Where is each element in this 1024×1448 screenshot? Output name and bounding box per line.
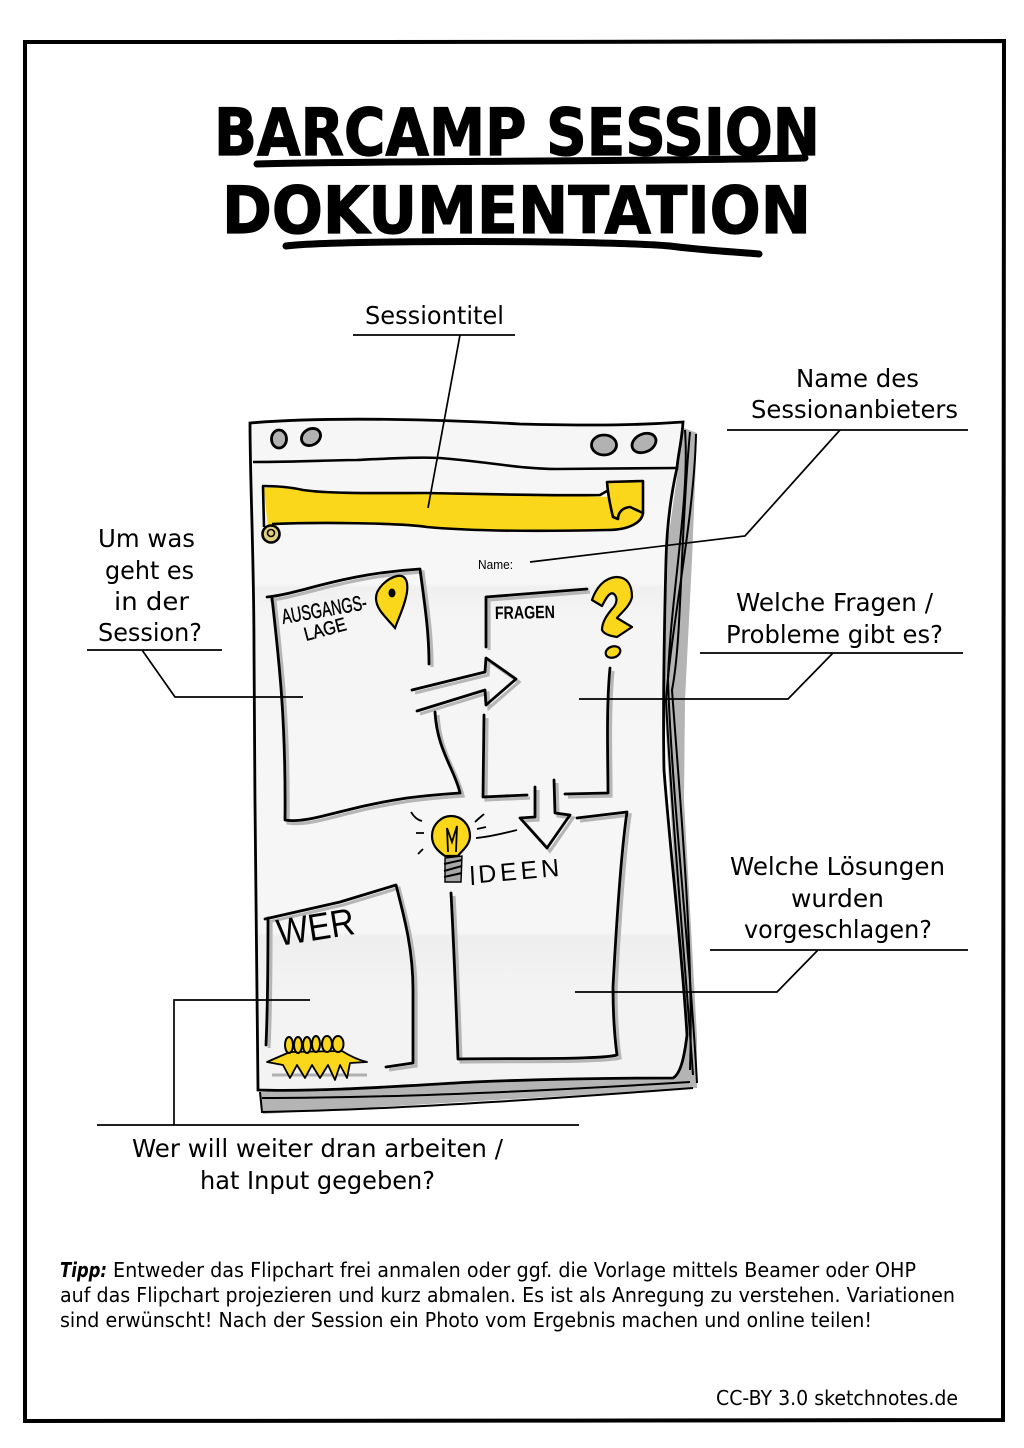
flipchart illustration <box>250 419 697 1114</box>
box heading: Ausgangslage <box>280 591 369 646</box>
annotation: Wer will weiter dran arbeiten <box>97 1000 579 1195</box>
title: BARCAMP SESSION <box>214 96 820 171</box>
annotation: Welche Lösungen wurden vorgeschlagen?: vorgeschlagen? <box>744 915 932 944</box>
annotation: Name des Sessionanbieters: Name des <box>796 364 919 393</box>
annotation: Sessiontitel <box>353 301 515 508</box>
box heading: Ausgangslage: AUSGANGS- <box>280 591 369 629</box>
sketched boxes and arrows <box>265 569 627 1067</box>
title <box>214 96 820 254</box>
annotation: Welche Fragen / Probleme gibt es? <box>579 588 963 699</box>
box shadows <box>268 572 630 1070</box>
box heading: Fragen: FRAGEN <box>495 602 555 623</box>
paper sheet <box>250 419 687 1090</box>
annotation: Name des Sessionanbieters: Sessionanbieters <box>751 395 958 424</box>
title banner <box>262 481 644 542</box>
annotation: Um was geht es in der Session?: Um was <box>98 524 195 553</box>
annotation: Wer will weiter dran arbeiten: Wer will weiter dran arbeiten / <box>132 1134 504 1163</box>
paper header line <box>253 458 677 469</box>
credit: CC-BY 3.0 sketchnotes.de <box>716 1386 958 1410</box>
tip text: Entweder das Flipchart frei anmalen oder ggf. die Vorlage mittels Beamer oder OHP <box>113 1258 916 1282</box>
annotation: Wer will weiter dran arbeiten: hat Input gegeben? <box>200 1166 435 1195</box>
annotation: Name des Sessionanbieters <box>530 364 968 562</box>
annotation: Um was geht es in der Session?: in der <box>114 587 190 616</box>
annotation: Welche Lösungen wurden vorgeschlagen?: wurden <box>791 884 884 913</box>
title: DOKUMENTATION <box>222 174 811 249</box>
name field label: Name: <box>478 557 513 572</box>
annotation: Welche Lösungen wurden vorgeschlagen?: Welche Lösungen <box>730 852 945 881</box>
tip text: Tipp: <box>60 1258 107 1282</box>
icon: question mark <box>592 577 632 660</box>
annotation: Welche Lösungen wurden vorgeschlagen? <box>575 852 968 992</box>
box heading: Ideen: DEEN <box>477 854 560 889</box>
annotation: Um was geht es in der Session?: geht es <box>105 556 194 585</box>
annotation: Welche Fragen / Probleme gibt es?: Probleme gibt es? <box>726 620 943 649</box>
tip text: sind erwünscht! Nach der Session ein Photo vom Ergebnis machen und online teilen! <box>60 1308 872 1332</box>
box heading: Ausgangslage: LAGE <box>302 614 349 646</box>
annotation: Um was geht es in der Session?: Session? <box>98 618 202 647</box>
annotation: Sessiontitel: Sessiontitel <box>365 301 504 330</box>
punched holes <box>272 425 659 456</box>
back pages <box>260 428 697 1114</box>
annotation: Welche Fragen / Probleme gibt es?: Welche Fragen / <box>736 588 934 617</box>
icon: map pin <box>376 576 407 628</box>
annotation: Um was geht es in der Session? <box>87 524 303 697</box>
tip text: auf das Flipchart projezieren und kurz abmalen. Es ist als Anregung zu verstehen. Variationen <box>60 1283 955 1307</box>
tip text <box>60 1258 955 1332</box>
icon: light bulb <box>411 812 517 882</box>
box heading: Wer: WER <box>274 901 357 955</box>
title underline <box>257 158 805 254</box>
icon: crowd of people <box>267 1036 367 1080</box>
